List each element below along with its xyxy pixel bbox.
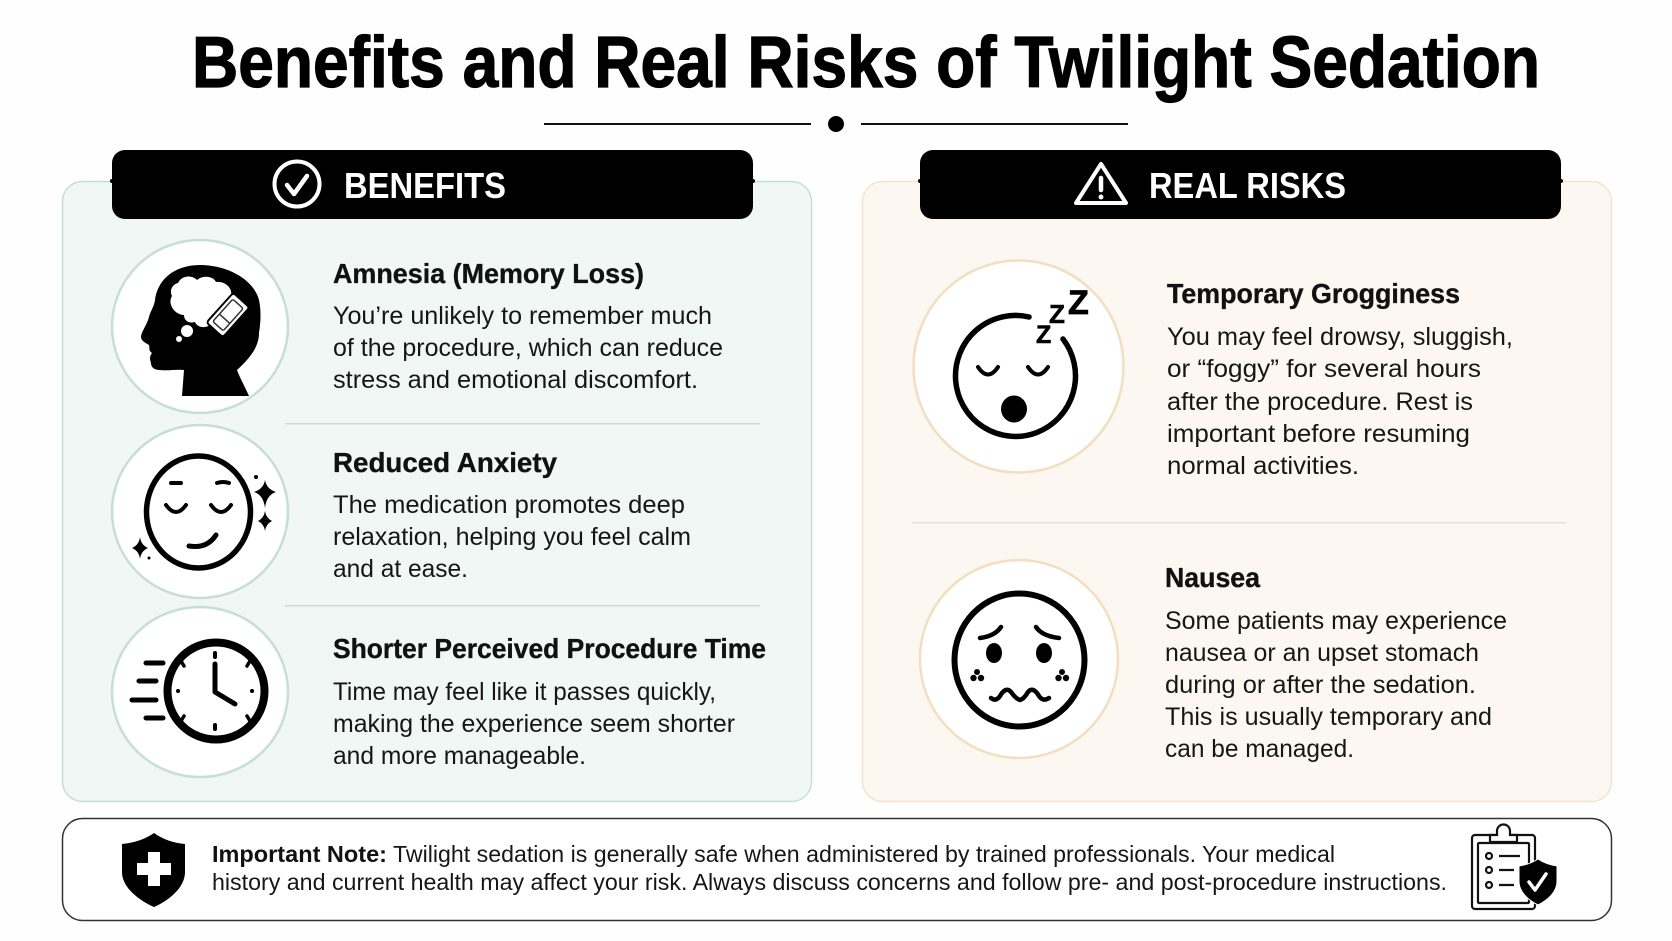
shorter time heading: Shorter Perceived Procedure Time xyxy=(333,633,766,664)
reduced anxiety description: relaxation, helping you feel calm xyxy=(333,523,691,551)
grogginess description: normal activities. xyxy=(1167,452,1359,480)
nausea description: Some patients may experience xyxy=(1165,607,1507,635)
reduced anxiety heading: Reduced Anxiety xyxy=(333,447,557,478)
amnesia description: stress and emotional discomfort. xyxy=(333,366,698,394)
risk: grogginess xyxy=(914,260,1513,480)
amnesia description: You’re unlikely to remember much xyxy=(333,302,712,330)
shorter time description: Time may feel like it passes quickly, xyxy=(333,678,716,706)
icon: clipboard with shield xyxy=(1472,825,1557,909)
grogginess description: after the procedure. Rest is xyxy=(1167,388,1473,416)
risk: nausea xyxy=(920,560,1507,763)
sleep letters: Z xyxy=(1036,321,1051,349)
icon: clock with speed lines xyxy=(112,607,288,777)
panel: benefits xyxy=(62,150,812,802)
icon: check circle xyxy=(274,162,320,206)
amnesia description xyxy=(333,302,723,394)
note text: Twilight sedation is generally safe when administered by trained professionals. Your medical xyxy=(393,841,1335,867)
reduced anxiety description: and at ease. xyxy=(333,555,468,583)
panel: real risks xyxy=(862,150,1612,802)
shorter time description: and more manageable. xyxy=(333,742,586,770)
note text xyxy=(212,841,1447,895)
nausea heading: Nausea xyxy=(1165,562,1260,593)
grogginess description: You may feel drowsy, sluggish, xyxy=(1167,323,1513,351)
grogginess description: important before resuming xyxy=(1167,420,1470,448)
grogginess heading: Temporary Grogginess xyxy=(1167,278,1460,309)
title divider xyxy=(544,116,1128,132)
grogginess description xyxy=(1167,323,1513,480)
grogginess description: or “foggy” for several hours xyxy=(1167,355,1481,383)
nausea description: during or after the sedation. xyxy=(1165,671,1476,699)
benefits header bar xyxy=(110,150,755,219)
nausea description: This is usually temporary and xyxy=(1165,703,1492,731)
shorter time description xyxy=(333,678,735,770)
icon: medical shield xyxy=(122,833,185,907)
benefits heading: BENEFITS xyxy=(344,165,506,206)
icon: calm face with sparkles xyxy=(112,425,288,598)
icon: warning triangle xyxy=(1076,164,1126,203)
benefit: amnesia xyxy=(112,240,723,413)
icon: nauseous face xyxy=(920,560,1118,758)
benefit: shorter perceived time xyxy=(112,607,766,777)
nausea description xyxy=(1165,607,1507,763)
nausea description: can be managed. xyxy=(1165,735,1354,763)
sleep letters xyxy=(1036,284,1089,349)
nausea description: nausea or an upset stomach xyxy=(1165,639,1479,667)
icon: sleeping face xyxy=(914,260,1124,472)
reduced anxiety description xyxy=(333,491,691,583)
reduced anxiety description: The medication promotes deep xyxy=(333,491,685,519)
risks header bar xyxy=(918,150,1563,219)
shorter time description: making the experience seem shorter xyxy=(333,710,735,738)
panel: important note xyxy=(62,818,1612,920)
sleep letters: Z xyxy=(1068,284,1089,322)
benefit: reduced anxiety xyxy=(112,425,691,598)
sleep letters: Z xyxy=(1049,299,1065,329)
amnesia heading: Amnesia (Memory Loss) xyxy=(333,258,644,289)
icon: head with memory eraser xyxy=(112,240,288,413)
risks heading: REAL RISKS xyxy=(1149,165,1346,206)
title: Benefits and Real Risks of Twilight Sedation xyxy=(192,23,1540,103)
amnesia description: of the procedure, which can reduce xyxy=(333,334,723,362)
note text: history and current health may affect your risk. Always discuss concerns and follow pre- and post-procedure instructions. xyxy=(212,869,1447,895)
note text: Important Note: xyxy=(212,841,387,867)
